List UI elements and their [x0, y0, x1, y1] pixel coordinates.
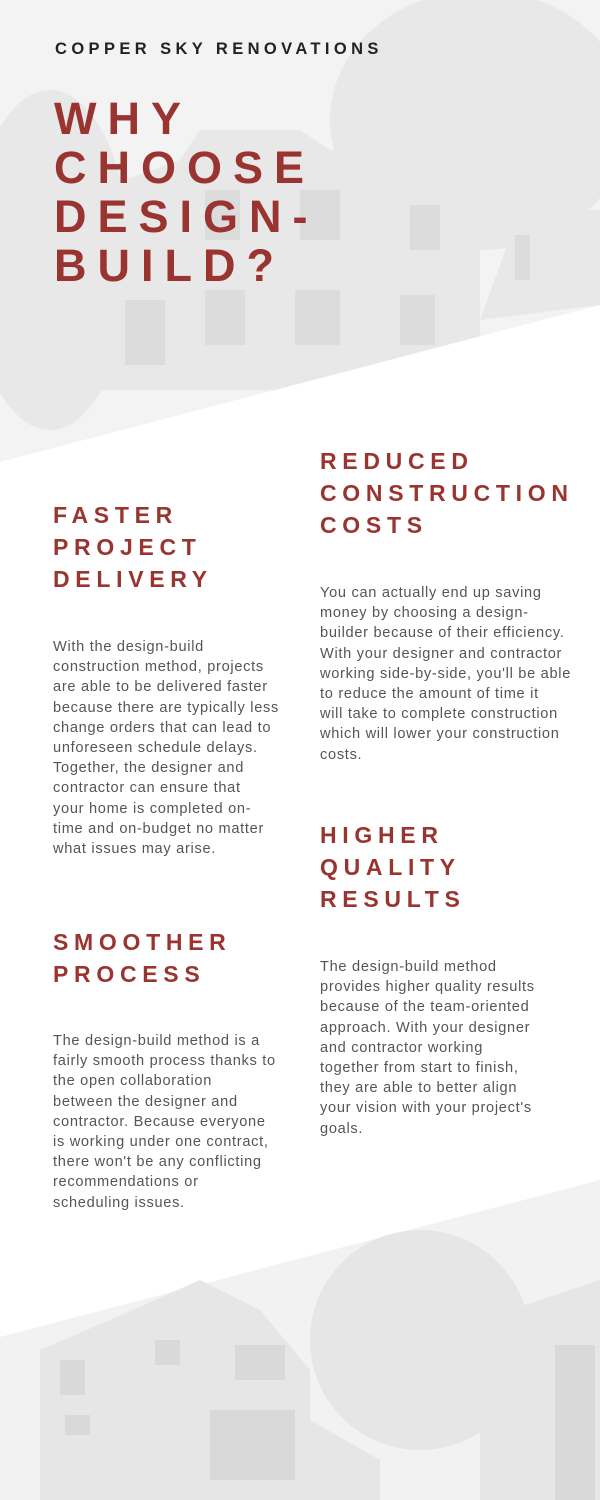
heading: faster project delivery: DELIVERY: [53, 566, 213, 592]
text: faster delivery: time and on-budget no matter: [53, 821, 264, 837]
text: faster delivery: contractor can ensure that: [53, 780, 241, 796]
text: faster delivery: what issues may arise.: [53, 841, 216, 857]
text: higher quality: provides higher quality results: [320, 979, 535, 995]
heading: higher quality results: QUALITY: [320, 854, 461, 880]
text: smoother process: is working under one contract,: [53, 1134, 269, 1150]
text: reduced costs: which will lower your construction: [320, 726, 560, 742]
heading: reduced construction costs: REDUCED: [320, 448, 474, 474]
text: higher quality: goals.: [320, 1121, 363, 1137]
text: reduced costs: [320, 585, 571, 763]
text: smoother process: [53, 1033, 276, 1211]
text: higher quality: [320, 959, 535, 1137]
text: faster delivery: change orders that can lead to: [53, 720, 271, 736]
text: reduced costs: costs.: [320, 747, 362, 763]
text: reduced costs: will take to complete construction: [320, 706, 558, 722]
heading: higher quality results: HIGHER: [320, 822, 444, 848]
bottom photo background: [0, 1180, 600, 1500]
heading: smoother process: SMOOTHER: [53, 929, 232, 955]
text: smoother process: between the designer and: [53, 1094, 238, 1110]
text: smoother process: there won't be any conflicting: [53, 1154, 262, 1170]
text: faster delivery: With the design-build: [53, 639, 204, 655]
text: faster delivery: [53, 639, 279, 857]
text: higher quality: because of the team-oriented: [320, 999, 529, 1015]
text: faster delivery: unforeseen schedule delays.: [53, 740, 258, 756]
text: higher quality: and contractor working: [320, 1040, 483, 1056]
text: reduced costs: With your designer and contractor: [320, 646, 562, 662]
text: higher quality: together from start to finish,: [320, 1060, 519, 1076]
text: smoother process: the open collaboration: [53, 1073, 212, 1089]
text: faster delivery: because there are typically less: [53, 700, 279, 716]
text: higher quality: they are able to better align: [320, 1080, 517, 1096]
heading: smoother process: [53, 929, 232, 987]
text: smoother process: recommendations or: [53, 1174, 199, 1190]
heading: reduced construction costs: CONSTRUCTION: [320, 480, 574, 506]
title: DESIGN-: [54, 191, 319, 242]
heading: smoother process: PROCESS: [53, 961, 205, 987]
text: faster delivery: Together, the designer and: [53, 760, 244, 776]
text: reduced costs: You can actually end up saving: [320, 585, 542, 601]
title: WHY: [54, 93, 192, 144]
text: faster delivery: are able to be delivered faster: [53, 679, 268, 695]
text: reduced costs: builder because of their efficiency.: [320, 625, 565, 641]
text: reduced costs: to reduce the amount of time it: [320, 686, 539, 702]
heading: faster project delivery: [53, 502, 213, 592]
heading: higher quality results: RESULTS: [320, 886, 466, 912]
text: higher quality: approach. With your designer: [320, 1020, 530, 1036]
text: reduced costs: money by choosing a design-: [320, 605, 529, 621]
text: faster delivery: construction method, projects: [53, 659, 264, 675]
text: higher quality: The design-build method: [320, 959, 497, 975]
heading: higher quality results: [320, 822, 466, 912]
heading: reduced construction costs: COSTS: [320, 512, 428, 538]
top photo background: [0, 0, 600, 462]
text: smoother process: The design-build method is a: [53, 1033, 260, 1049]
heading: faster project delivery: FASTER: [53, 502, 178, 528]
title: CHOOSE: [54, 142, 315, 193]
title: [54, 93, 319, 291]
text: smoother process: scheduling issues.: [53, 1195, 185, 1211]
heading: faster project delivery: PROJECT: [53, 534, 202, 560]
text: faster delivery: your home is completed on-: [53, 801, 251, 817]
text: reduced costs: working side-by-side, you'll be able: [320, 666, 571, 682]
text: smoother process: fairly smooth process thanks to: [53, 1053, 276, 1069]
brand name: COPPER SKY RENOVATIONS: [55, 40, 383, 58]
text: smoother process: contractor. Because everyone: [53, 1114, 266, 1130]
heading: reduced construction costs: [320, 448, 574, 538]
title: BUILD?: [54, 240, 285, 291]
text: higher quality: your vision with your project's: [320, 1100, 532, 1116]
